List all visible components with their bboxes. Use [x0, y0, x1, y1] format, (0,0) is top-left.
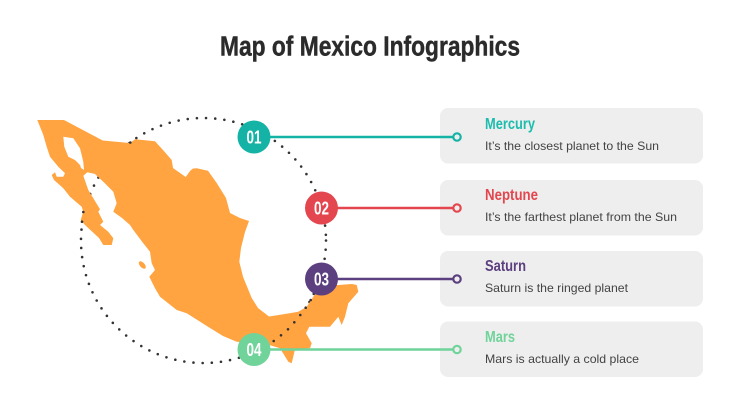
heading: Saturn	[485, 258, 526, 275]
dotted circle	[81, 118, 326, 363]
connector end ring	[453, 346, 461, 353]
card background	[440, 322, 703, 377]
number badge 02	[305, 192, 338, 224]
panel: Mercury	[238, 108, 703, 164]
panel: Mars	[238, 322, 703, 377]
number 03: 03	[314, 270, 329, 290]
map of Mexico	[37, 120, 358, 363]
connector line	[254, 136, 453, 138]
connector end ring	[453, 275, 461, 283]
heading: Mercury	[485, 116, 535, 133]
panel: Saturn	[305, 251, 703, 306]
description: It’s the farthest planet from the Sun	[485, 210, 677, 224]
number 04: 04	[246, 340, 262, 360]
card background	[440, 108, 703, 164]
dots over the map	[81, 141, 312, 342]
number 01: 01	[246, 128, 262, 148]
connector line	[321, 207, 453, 209]
number badge 04	[238, 333, 270, 366]
connector line	[254, 348, 453, 351]
heading: Neptune	[485, 187, 538, 204]
number badge 03	[305, 262, 338, 296]
island	[138, 260, 147, 270]
mainland and Baja California	[37, 120, 358, 363]
connector line	[322, 278, 453, 280]
number badge 01	[238, 120, 270, 154]
description: Mars is actually a cold place	[485, 352, 639, 366]
description: Saturn is the ringed planet	[485, 281, 629, 295]
connector end ring	[453, 133, 461, 141]
number 02: 02	[314, 198, 329, 218]
panel: Neptune	[305, 180, 703, 236]
card background	[440, 251, 703, 306]
heading: Mars	[485, 329, 515, 346]
title: Map of Mexico Infographics	[220, 30, 520, 62]
connector end ring	[453, 204, 461, 212]
card background	[440, 180, 703, 236]
description: It’s the closest planet to the Sun	[485, 139, 659, 153]
